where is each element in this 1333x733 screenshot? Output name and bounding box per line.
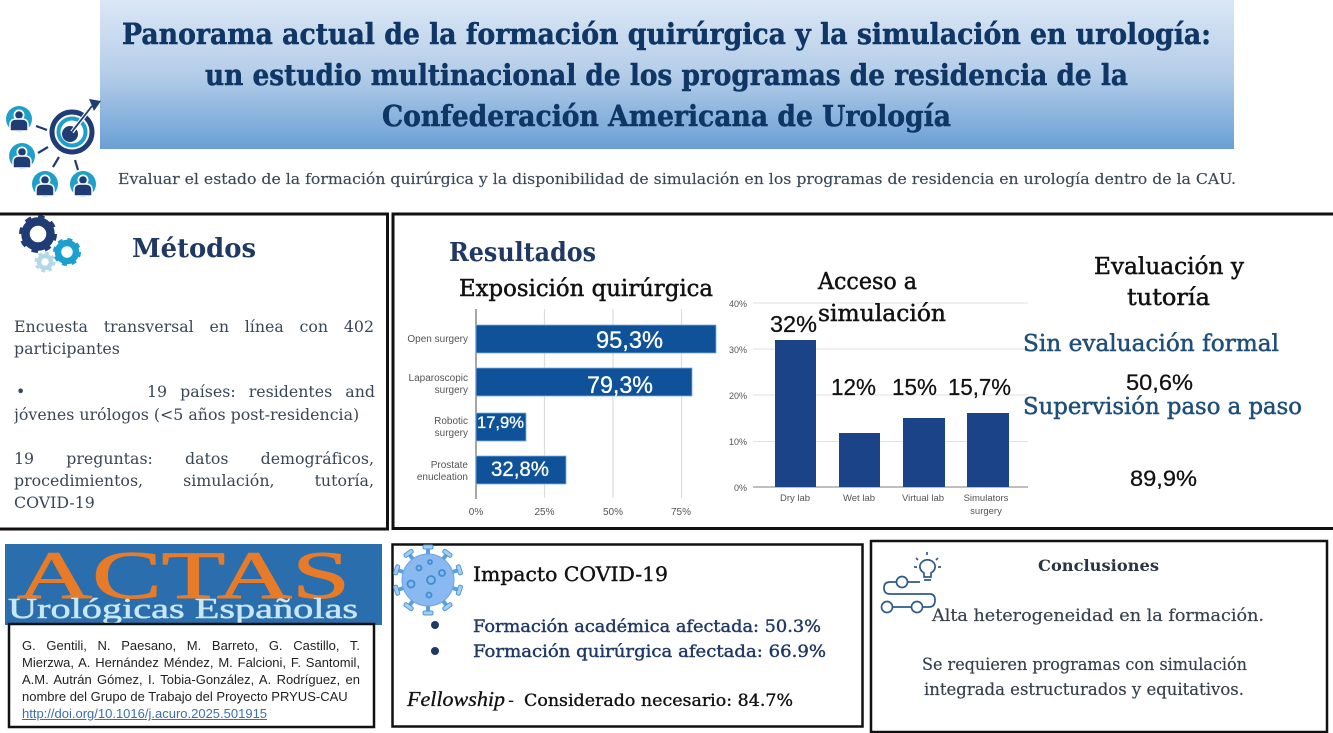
title: Panorama actual de la formación quirúrgica y la simulación en urología: [122, 17, 1211, 51]
heading: evaluación y tutoría: Evaluación y [1094, 254, 1244, 280]
bar chart: acceso a simulación [729, 299, 1028, 517]
bar chart: acceso a simulación: surgery [970, 506, 1002, 517]
bar chart: exposición quirúrgica: 32,8% [491, 458, 549, 481]
bar chart: exposición quirúrgica: 79,3% [587, 372, 653, 399]
stat: sin evaluación formal: Sin evaluación formal [1023, 331, 1279, 357]
bar chart: exposición quirúrgica: Robotic [434, 416, 468, 427]
conclusion text: Alta heterogeneidad en la formación. [931, 606, 1264, 625]
bar chart: exposición quirúrgica: 25% [534, 507, 555, 518]
bar chart: exposición quirúrgica: Laparoscopic [409, 373, 468, 384]
fellowship note: - [508, 690, 514, 711]
methods text: participantes [14, 339, 120, 358]
title: un estudio multinacional de los programas de residencia de la [205, 58, 1128, 92]
title [122, 17, 1211, 133]
heading: acceso a simulación [817, 269, 946, 327]
heading: resultados: Resultados [449, 238, 596, 268]
methods text: COVID-19 [14, 493, 95, 512]
stat: supervisión paso a paso [1023, 394, 1302, 491]
authors box: G. Gentili, N. Paesano, M. Barreto, G. Castillo, T. [22, 638, 360, 653]
panel: impacto COVID-19 [392, 544, 862, 726]
bar chart: exposición quirúrgica: Open surgery [407, 334, 468, 345]
bullet: formación académica: Formación académica afectada: 50.3% [473, 617, 821, 637]
panel: resultados [393, 214, 1333, 528]
bar chart: exposición quirúrgica: 50% [603, 507, 623, 518]
conclusion text: integrada estructurados y equitativos. [924, 680, 1244, 699]
logo: Actas Urológicas Españolas [5, 537, 382, 625]
panel: conclusiones [871, 541, 1327, 732]
heading: exposición quirúrgica: Exposición quirúrgica [459, 276, 713, 302]
bar chart: acceso a simulación: Dry lab [780, 493, 810, 504]
stat: sin evaluación formal [1023, 331, 1279, 395]
bar chart: exposición quirúrgica: surgery [435, 428, 468, 439]
bar chart: acceso a simulación: 15,7% [948, 374, 1011, 400]
heading: evaluación y tutoría [1094, 254, 1244, 311]
bar chart: acceso a simulación: 20% [729, 391, 747, 401]
conclusion text [922, 606, 1264, 699]
bar chart: acceso a simulación: 40% [729, 299, 747, 309]
panel: métodos [0, 214, 388, 529]
bar chart: acceso a simulación: Simulators [964, 493, 1009, 504]
methods text: procedimientos, simulación, tutoría, [14, 471, 374, 490]
authors box: nombre del Grupo de Trabajo del Proyecto PRYUS-CAU [22, 689, 348, 704]
title: Confederación Americana de Urología [382, 99, 951, 133]
methods text: jóvenes urólogos (<5 años post-residencia) [14, 405, 359, 424]
bar chart: exposición quirúrgica: Prostate [431, 460, 468, 471]
fellowship note [406, 687, 793, 711]
stat: sin evaluación formal: 50,6% [1126, 370, 1193, 395]
bar chart: exposición quirúrgica: 75% [671, 507, 691, 518]
methods text: 19 preguntas: datos demográficos, [14, 449, 374, 468]
authors box [9, 624, 374, 727]
bar chart: acceso a simulación: Virtual lab [902, 493, 944, 504]
icon: target with people [6, 99, 101, 197]
icon: gears [22, 218, 79, 271]
bar chart: exposición quirúrgica: 17,9% [477, 413, 524, 432]
methods text: 19 países: residentes and [147, 382, 375, 401]
bar chart: acceso a simulación: 15% [892, 374, 937, 400]
heading: impacto COVID-19: Impacto COVID-19 [473, 562, 668, 586]
bar chart: acceso a simulación: 0% [734, 483, 747, 493]
methods text [14, 316, 376, 520]
bar chart: exposición quirúrgica: enucleation [417, 472, 468, 483]
methods text: • [16, 382, 25, 401]
fellowship note: Considerado necesario: 84.7% [524, 691, 793, 711]
bar chart: acceso a simulación: 30% [729, 345, 747, 355]
title banner [100, 0, 1234, 149]
heading: evaluación y tutoría: tutoría [1127, 285, 1210, 311]
bar chart: exposición quirúrgica: surgery [435, 385, 468, 396]
bar chart: acceso a simulación: 10% [729, 437, 747, 447]
column: evaluación y tutoría [1023, 254, 1302, 491]
bar chart: exposición quirúrgica: 95,3% [596, 327, 663, 354]
objective text: Evaluar el estado de la formación quirúrgica y la disponibilidad de simulación en los programas de residencia en urología dentro de la CAU. [118, 170, 1236, 188]
heading: métodos: Métodos [132, 234, 256, 264]
heading: acceso a simulación: simulación [818, 301, 946, 327]
bar chart: exposición quirúrgica: 0% [469, 507, 483, 518]
icon: virus [393, 545, 463, 615]
bar chart: acceso a simulación: Wet lab [843, 493, 875, 504]
bar chart: acceso a simulación: 12% [831, 374, 876, 400]
authors box: http://doi.org/10.1016/j.acuro.2025.501915 [22, 706, 267, 721]
conclusion text: Se requieren programas con simulación [922, 655, 1247, 674]
authors box: Mierzwa, A. Hernández Méndez, M. Falcioni, F. Santomil, [22, 655, 360, 670]
methods text: Encuesta transversal en línea con 402 [14, 317, 374, 336]
bar chart: acceso a simulación: 32% [770, 311, 817, 337]
icon: roadmap with lightbulb [882, 552, 941, 612]
authors box: A.M. Autrán Gómez, I. Tobia-González, A. Rodríguez, en [22, 672, 360, 687]
stat: supervisión paso a paso: Supervisión paso a paso [1023, 394, 1302, 420]
heading: conclusiones: Conclusiones [1038, 556, 1159, 575]
stat: supervisión paso a paso: 89,9% [1130, 466, 1197, 491]
logo: Actas Urológicas Españolas: Urológicas Españolas [8, 594, 358, 625]
heading: acceso a simulación: Acceso a [817, 269, 917, 295]
bar chart: exposición quirúrgica [407, 309, 716, 518]
fellowship note: Fellowship [406, 687, 505, 711]
logo: Actas Urológicas Españolas: ACTAS [17, 537, 350, 613]
bullet: formación quirúrgica: Formación quirúrgica afectada: 66.9% [473, 642, 826, 662]
